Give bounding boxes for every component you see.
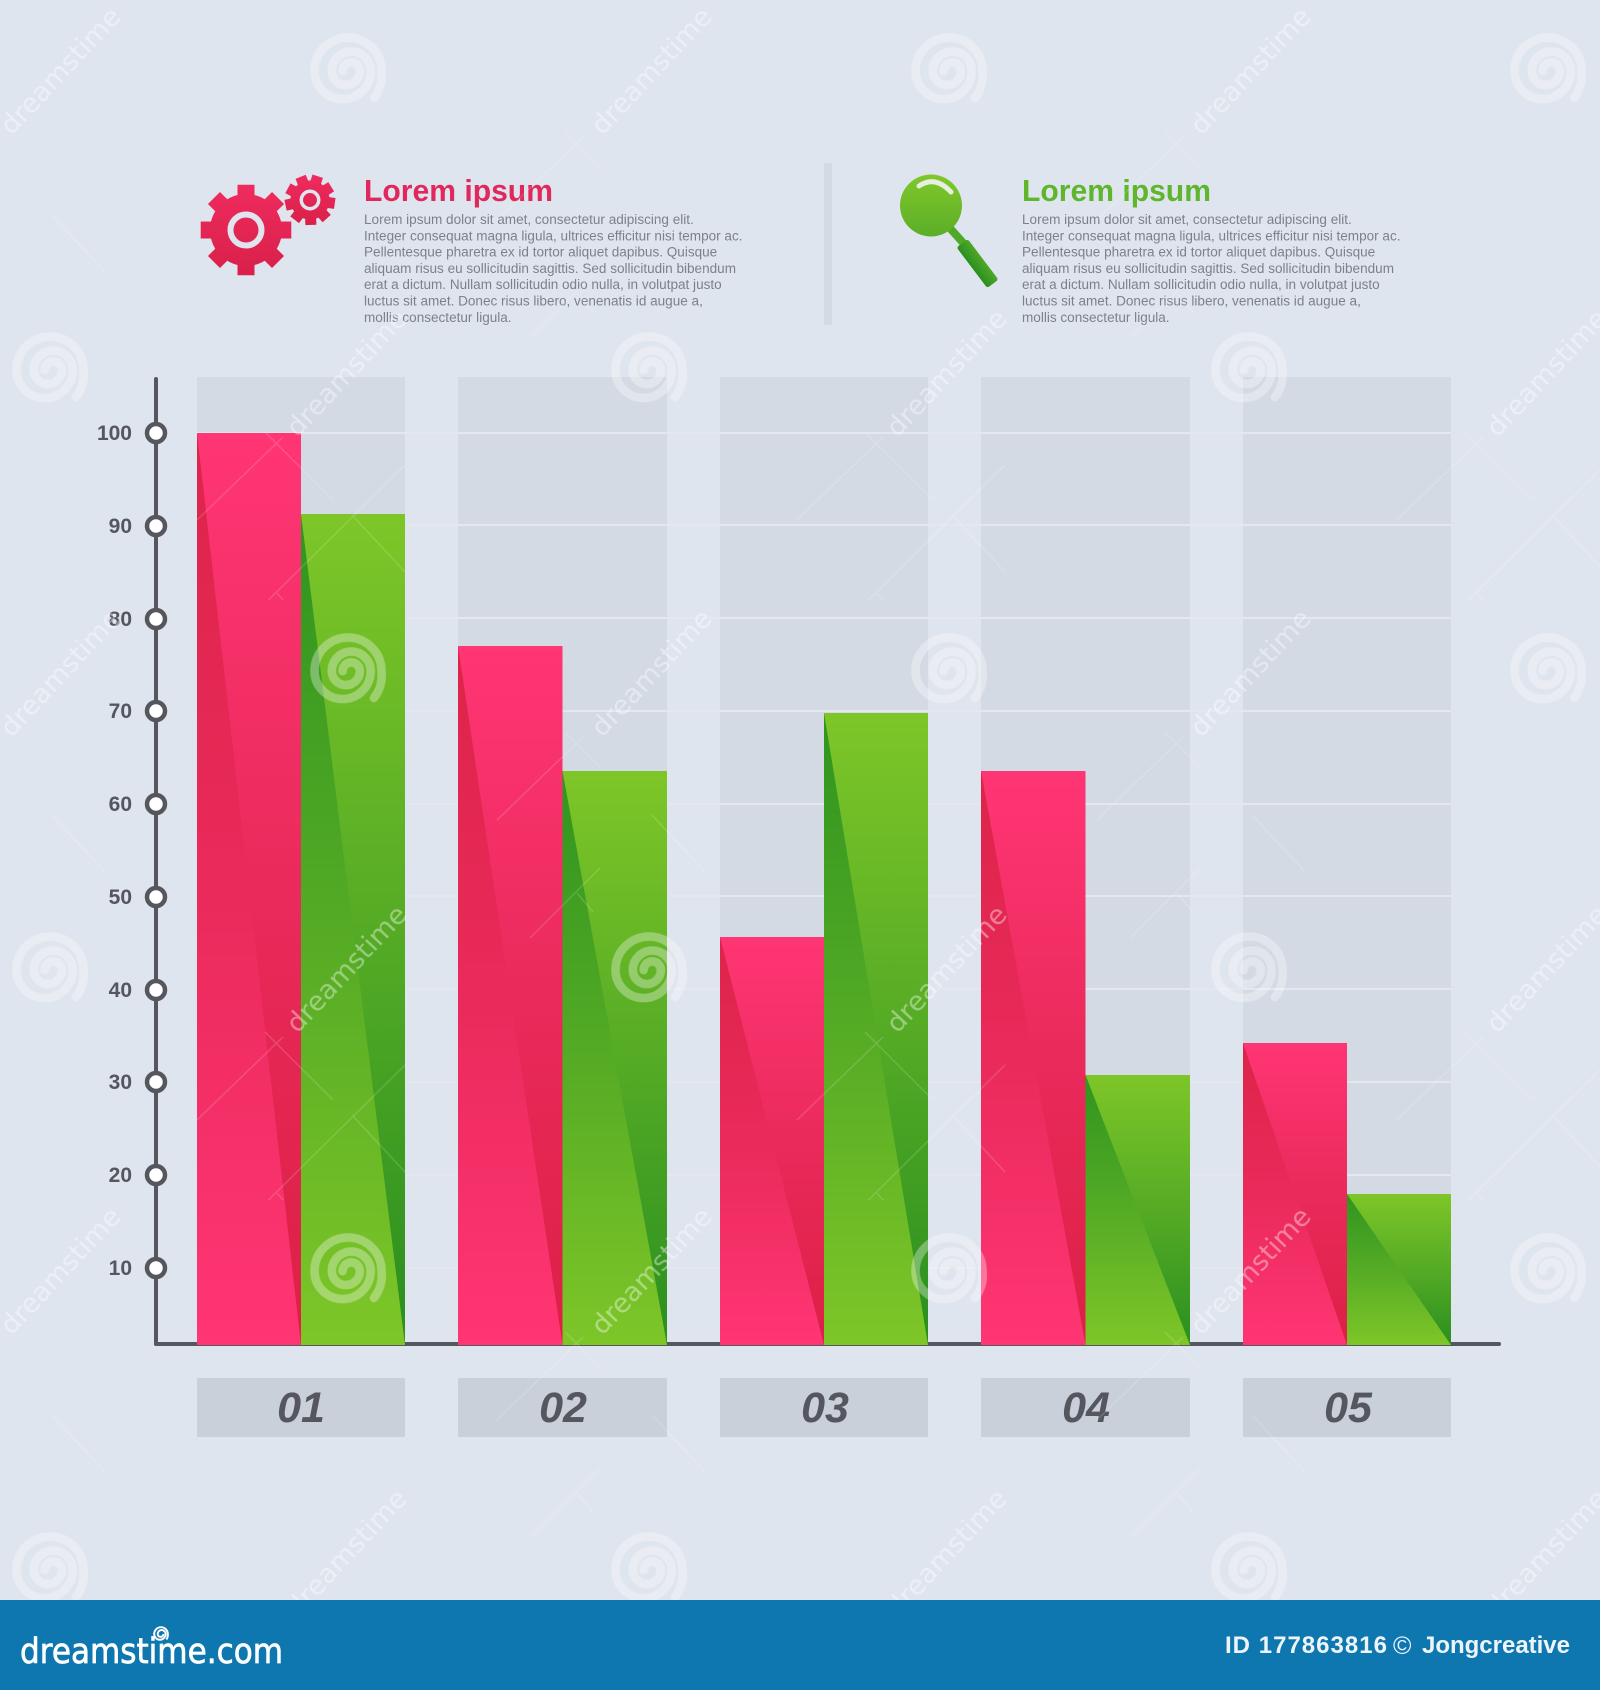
axis ticks and labels: 100 (97, 422, 132, 445)
axis ticks and labels: 60 (109, 793, 132, 816)
watermark overlay: dreamstime (280, 899, 413, 1039)
category labels: 01 (277, 1384, 325, 1432)
text block: right description: mollis consectetur ligula. (1022, 310, 1170, 325)
watermark overlay: dreamstime (1184, 1201, 1317, 1341)
text block: right description: luctus sit amet. Donec risus libero, venenatis id augue a, (1022, 294, 1361, 308)
text block: right description: erat a dictum. Nullam sollicitudin odio nulla, in volutpat justo (1022, 277, 1380, 292)
category labels: 05 (1324, 1384, 1373, 1432)
watermark overlay: dreamstime (880, 899, 1013, 1039)
watermark overlay: dreamstime (280, 1483, 413, 1623)
text block: right description: Integer consequat magna ligula, ultrices efficitur nisi tempor ac. (1022, 228, 1401, 243)
panel: magnifier info (900, 174, 1401, 325)
text block: left description: erat a dictum. Nullam sollicitudin odio nulla, in volutpat justo (364, 277, 722, 292)
bar chart (97, 377, 1499, 1437)
watermark overlay: dreamstime (585, 603, 718, 743)
heading: pink: Lorem ipsum (364, 175, 553, 208)
bar group 01 (197, 433, 405, 1345)
image credit: © (1393, 1632, 1412, 1660)
bar group 05 (1243, 1043, 1451, 1345)
icon: logo spiral (154, 1627, 168, 1640)
y axis (154, 379, 158, 1344)
bar group 03 (720, 713, 928, 1345)
axis ticks and labels: 80 (109, 608, 132, 631)
watermark overlay: dreamstime (585, 1, 718, 141)
watermark overlay: dreamstime (880, 303, 1013, 443)
panel: gears info (195, 172, 743, 325)
text block: right description: aliquam risus eu sollicitudin sagittis. Sed sollicitudin bibendum (1022, 261, 1394, 276)
watermark overlay: dreamstime (1184, 603, 1317, 743)
watermark overlay: dreamstime (1184, 1, 1317, 141)
axis ticks and labels: 40 (109, 979, 132, 1002)
image credit (1225, 1632, 1570, 1660)
chart column backgrounds (197, 377, 1451, 1345)
bar group 02 (458, 646, 667, 1345)
image credit: ID 177863816 (1225, 1632, 1387, 1659)
logo text: dreamstime.com (20, 1632, 283, 1672)
icon: magnifying glass (900, 174, 998, 288)
axis ticks and labels (97, 422, 165, 1280)
image credit: Jongcreative (1422, 1632, 1570, 1659)
text block: left description: Integer consequat magna ligula, ultrices efficitur nisi tempor ac. (364, 228, 743, 243)
text block: right description: Pellentesque pharetra ex id tortor aliquet dapibus. Quisque (1022, 245, 1375, 260)
category labels: 02 (539, 1384, 587, 1432)
footer banner (0, 1600, 1600, 1690)
text block: left description: Pellentesque pharetra ex id tortor aliquet dapibus. Quisque (364, 245, 717, 260)
heading: green: Lorem ipsum (1022, 175, 1211, 208)
axis ticks and labels: 30 (109, 1071, 132, 1094)
axis ticks and labels: 70 (109, 700, 132, 723)
bar group 04 (981, 771, 1190, 1345)
category labels: 03 (801, 1384, 849, 1432)
axis ticks and labels: 10 (109, 1257, 132, 1280)
text block: left description: Lorem ipsum dolor sit amet, consectetur adipiscing elit. (364, 212, 694, 227)
watermark overlay: dreamstime (585, 1201, 718, 1341)
text block: left description: aliquam risus eu sollicitudin sagittis. Sed sollicitudin bibendum (364, 261, 736, 276)
text block: left description: mollis consectetur ligula. (364, 310, 512, 325)
axis ticks and labels: 20 (109, 1164, 132, 1187)
text block: left description: luctus sit amet. Donec risus libero, venenatis id augue a, (364, 294, 703, 308)
category labels: 04 (1062, 1384, 1110, 1432)
axis ticks and labels: 90 (109, 515, 132, 538)
divider between info blocks (824, 163, 832, 325)
category labels (197, 1378, 1451, 1437)
axis ticks and labels: 50 (109, 886, 132, 909)
watermark overlay: dreamstime (280, 303, 413, 443)
text block: right description: Lorem ipsum dolor sit amet, consectetur adipiscing elit. (1022, 212, 1352, 227)
icon: gears (200, 174, 336, 276)
x axis (156, 1342, 1499, 1346)
watermark overlay: dreamstime (880, 1483, 1013, 1623)
